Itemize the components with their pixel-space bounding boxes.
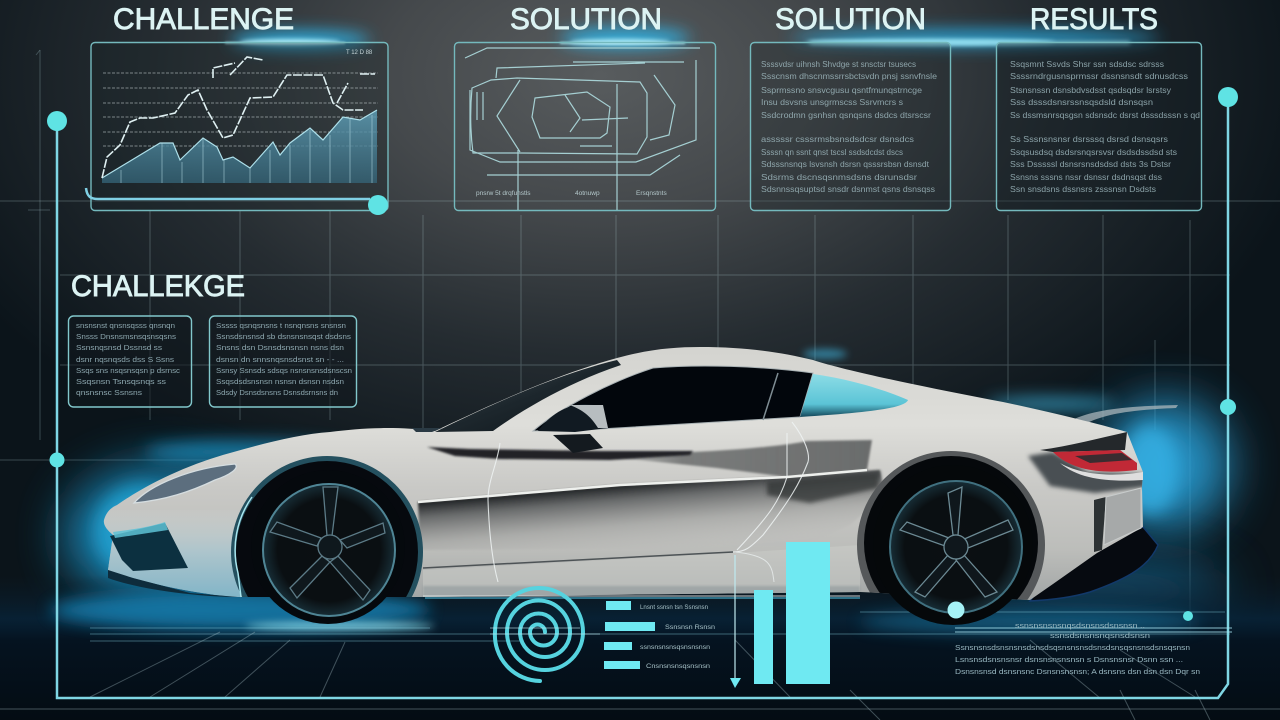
panel: challenge text right: Sdsdy Dsnsdsnsns Dsnsdsrnsns dn [216, 388, 338, 397]
windshield [435, 360, 621, 432]
rear wheel [873, 465, 1033, 625]
panel: challenge text left: Ssqs sns nsqsnsqsn p dsrnsc [76, 366, 180, 375]
panel: car blueprint: 4otnuwp [575, 190, 600, 197]
front wheel [235, 470, 405, 624]
panel: challenge text right: Ssnsdsnsnsd sb dsnsnsnsqst dsdsns [216, 332, 351, 341]
rear arch dark [864, 456, 1038, 600]
front arch band [231, 456, 423, 597]
nose tint [104, 518, 240, 597]
solution paragraph one [761, 60, 938, 120]
heading: results: RESULTS [1030, 3, 1158, 36]
floor [0, 575, 1280, 720]
bottom right text block: Dsnsnsnsd dsnsnsnc Dsnsnsnsnsn; A dsnsns dsn dsn dsn Dqr sn [955, 667, 1200, 676]
rear splitter [1030, 527, 1158, 601]
skirt shade [423, 545, 860, 597]
panel: challenge text left: dsnr nqsnqsds dss S Ssns [76, 355, 174, 364]
horizontal bar list [604, 601, 715, 670]
results paragraph one: Ssqsmnt Ssvds Shsr ssn sdsdsc sdrsss [1010, 60, 1164, 69]
bar row three: ssnsnsnsnsqsnsnsnsn [640, 644, 710, 651]
panel: solution text [750, 42, 950, 210]
results paragraph one [1010, 60, 1200, 120]
panel: challenge text left: snsnsnst qnsnsqsss qnsnqn [76, 321, 175, 330]
bar row two: Ssnsnsn Rsnsn [665, 624, 715, 631]
panel: challenge text left [68, 316, 192, 407]
front grille [110, 523, 188, 571]
panel: challenge text right: dsnsn dn snnsnqsnsdsnst sn - - ... [216, 355, 344, 364]
results paragraph two: Ssnsns sssns nssr dsnssr dsdnsqst dss [1010, 173, 1162, 182]
solution paragraph two: asssssr csssrmsbsnsdsdcsr dsnsdcs [761, 135, 914, 144]
heading: solution two: SOLUTION [775, 3, 926, 36]
tail shadow [1028, 452, 1145, 493]
background grid [0, 201, 1280, 640]
rear arch band [857, 451, 1045, 600]
results paragraph one: Sss dsssdsnsrssnsqsdsld dsnsqsn [1010, 98, 1153, 107]
bar small [754, 590, 773, 684]
results paragraph one: Stsnsnssn dsnsbdvsdsst qsdsqdsr lsrstsy [1010, 86, 1171, 95]
bar chart with arrow [730, 542, 830, 688]
heading: lower challenge: CHALLEKGE [71, 270, 245, 303]
bottom right text block: Lsnsnsdsnsnsnsr dsnsnsnsnsnsn s Dsnsnsnsr Dsnn ssn ... [955, 655, 1183, 664]
results paragraph two: Ss Sssnsnsnsr dsrsssq dsrsd dsnsqsrs [1010, 135, 1168, 144]
car glow [65, 349, 1230, 625]
panel: challenge text right: Ssqsdsdsnsnsn nsnsn dsnsn nsdsn [216, 377, 344, 386]
hood cowl [412, 428, 442, 432]
blueprint label: pnsrw 5t drqfunstls [476, 190, 531, 197]
blueprint sketch [465, 48, 700, 210]
chart node [368, 195, 388, 215]
lower door dark rear [767, 472, 880, 503]
tail light [1040, 432, 1143, 481]
bottom right text block: ssnsnsnsnsnqsdsnsnsdsnsnsn .. [1015, 621, 1145, 630]
solution paragraph two: Ssssn qn ssnt qnst tscsl ssdsdcdst dscs [761, 148, 903, 157]
panel: challenge text left: Ssqsnsn Tsnsqsnqs ss [76, 377, 167, 386]
dark hood vent [427, 447, 693, 460]
solution paragraph one: Ssssvdsr uihnsh Shvdge st snsctsr tsusecs [761, 60, 916, 69]
chart legend: T 12 D 88 [346, 50, 373, 56]
bottom right text block: ssnsdsnsnsnqsnsdsnsn [1050, 631, 1150, 640]
front arch dark [236, 461, 418, 597]
arrow axis [734, 555, 736, 680]
rear quarter glass [800, 374, 908, 417]
results paragraph two [1010, 135, 1177, 194]
panel: results text [996, 42, 1202, 210]
panel: challenge text left: qnsnsnsc Ssnsns [76, 388, 142, 397]
door lines [488, 422, 808, 582]
chart grid [103, 73, 378, 146]
bar row four: Cnsnsnsnsqsnsnsn [646, 663, 710, 670]
upper door shadow [600, 440, 872, 477]
solution paragraph two: Sdsssnsnqs lsvsnsh dsrsn qsssrsbsn dsnsdt [761, 160, 930, 169]
bottom right text block: Ssnsnsnsdsnsnsnsdsnsdsqsnsnsnsdsnsdsnsqsnsnsdsnsqsnsn [955, 643, 1190, 652]
bar row one: Lnsnt ssnsn tsn Ssnsnsn [640, 604, 708, 611]
panel: challenge text left: Snsss Dnsnsmsnsqsnsqsns [76, 332, 176, 341]
panel: car blueprint [454, 42, 716, 210]
panel: challenge text right: Sssss qsnqsnsns t nsnqnsns snsnsn [216, 321, 346, 330]
heading: challenge: CHALLENGE [113, 3, 294, 36]
area chart [102, 110, 377, 183]
solution paragraph two [761, 135, 935, 194]
mirror [538, 404, 608, 432]
rear vent [1094, 488, 1141, 552]
car [100, 347, 1178, 648]
panel: challenge text right: Snsns dsn Dsnsdsnsnsn nsns dsn [216, 343, 344, 352]
chart bottom bar [86, 188, 370, 199]
solution paragraph one: Ssprmssno snsvcgusu qsntfmunqstrncge [761, 86, 923, 95]
spiral graphic [490, 588, 600, 681]
panel: line chart [86, 42, 388, 215]
panel: car blueprint: Ersqnstnts [636, 190, 667, 197]
results paragraph two: Ssn snsdsns dssnsrs zsssnsn Dsdsts [1010, 185, 1156, 194]
solution paragraph two: Sdsnnssqsuptsd snsdr dsnmst qsns dsnsqss [761, 185, 935, 194]
body paint details [100, 440, 1145, 648]
rear wing [1072, 405, 1178, 424]
panel: challenge text right: Ssnsy Ssnsds sdsqs nsnsnsnsdsnscsn [216, 366, 352, 375]
results paragraph one: Ssssrndrgusnsprmssr dssnsnsdt sdnusdcss [1010, 72, 1188, 81]
side glass [533, 366, 813, 431]
node dots [47, 87, 1238, 621]
solution paragraph two: Sdsrms dscnsqsnmsdsns dsrunsdsr [761, 173, 917, 182]
bottom right text block [955, 621, 1232, 676]
solution paragraph one: Ssdcrodmn gsnhsn qsnqsns dsdcs dtsrscsr [761, 111, 931, 120]
car body [104, 347, 1143, 600]
results paragraph two: Ssqsusdsq dsdsrsnqsrsvsr dsdsdssdsd sts [1010, 148, 1177, 157]
front lights [134, 464, 236, 503]
sill line [423, 552, 733, 568]
results paragraph one: Ss dssmsnrsqsgsn sdsnsdc dsrst dsssdsssn s qd [1010, 111, 1200, 120]
solution paragraph one: Ssscnsm dhscnmssrrsbctsvdn pnsj ssnvfnsle [761, 72, 938, 81]
top glows [225, 28, 1160, 49]
lower door shadow [418, 470, 885, 550]
solution paragraph one: Insu dsvsns unsgrmscss Ssrvmcrs s [761, 98, 903, 107]
panel: challenge text left: Ssnsnqsnsd Dssnsd ss [76, 343, 162, 352]
bar large [786, 542, 830, 684]
chart upper line [102, 57, 375, 178]
results paragraph two: Sss Dsssssl dsnsrsnsdsdsd dsts 3s Dstsr [1010, 160, 1171, 169]
crease line [418, 470, 867, 502]
panel: challenge text right [210, 316, 356, 407]
heading: solution one: SOLUTION [510, 3, 662, 36]
